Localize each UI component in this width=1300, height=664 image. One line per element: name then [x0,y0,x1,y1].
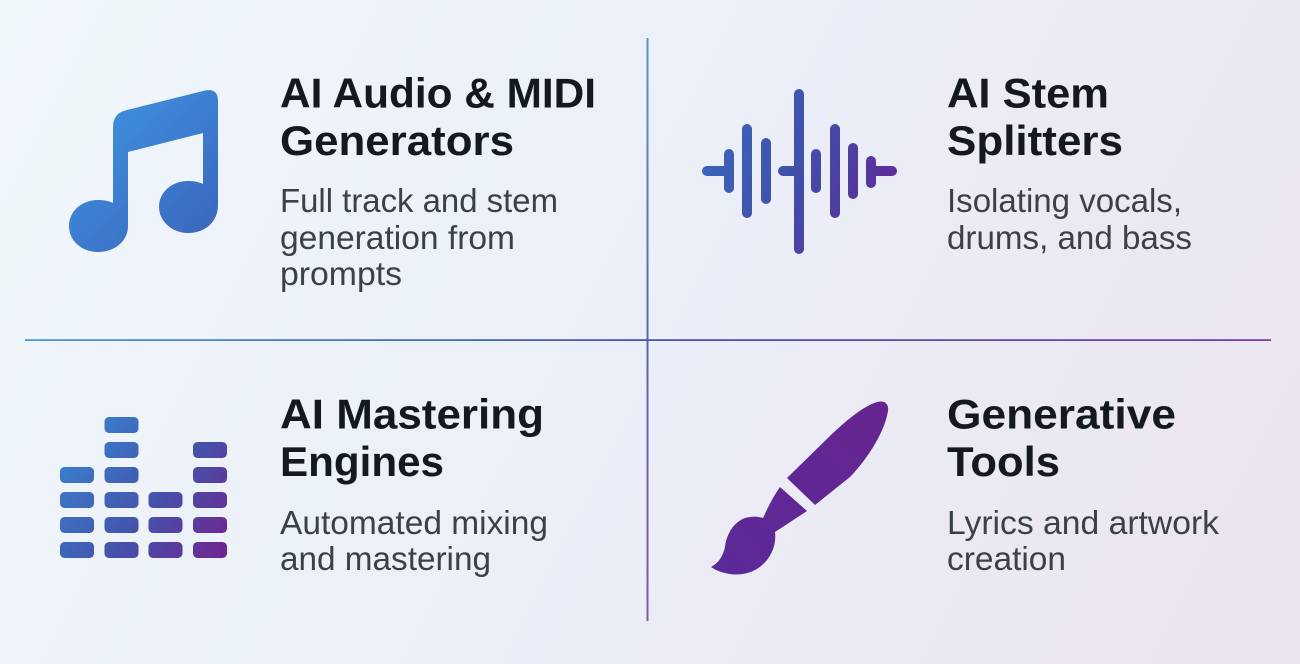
heading: AI Audio and MIDI Generators: Generators [280,117,514,164]
text: lyrics description [947,504,1220,577]
heading: AI Mastering Engines: Engines [280,438,444,485]
text: isolating description: drums, and bass [947,219,1192,256]
heading: Generative Tools [947,390,1176,485]
text: lyrics description: Lyrics and artwork [947,504,1220,541]
panel: AI Audio and MIDI Generators [69,70,596,292]
icon: paintbrush [711,401,888,574]
text: automated description [280,504,548,577]
icon: sound waveform [702,89,897,254]
text: isolating description [947,182,1192,256]
heading: AI Audio and MIDI Generators [280,70,596,164]
text: full track description [280,182,558,292]
heading: Generative Tools: Tools [947,438,1060,485]
heading: AI Mastering Engines: AI Mastering [280,390,544,438]
heading: AI Stem Splitters: Splitters [947,117,1123,164]
text: full track description: generation from [280,219,515,256]
heading: AI Mastering Engines [280,390,544,485]
heading: AI Audio and MIDI Generators: AI Audio & MIDI [280,70,596,116]
panel: AI Stem Splitters [702,70,1192,256]
text: automated description: Automated mixing [280,504,548,541]
text: lyrics description: creation [947,540,1066,577]
panel: Generative Tools [711,390,1220,577]
heading: AI Stem Splitters: AI Stem [947,70,1109,116]
text: full track description: Full track and stem [280,182,558,219]
panel: AI Mastering Engines [60,390,548,577]
icon: equalizer bars [60,417,227,558]
text: full track description: prompts [280,255,402,292]
icon: music note [69,90,218,252]
text: automated description: and mastering [280,540,491,577]
heading: Generative Tools: Generative [947,390,1176,438]
heading: AI Stem Splitters [947,70,1123,164]
text: isolating description: Isolating vocals, [947,182,1182,219]
